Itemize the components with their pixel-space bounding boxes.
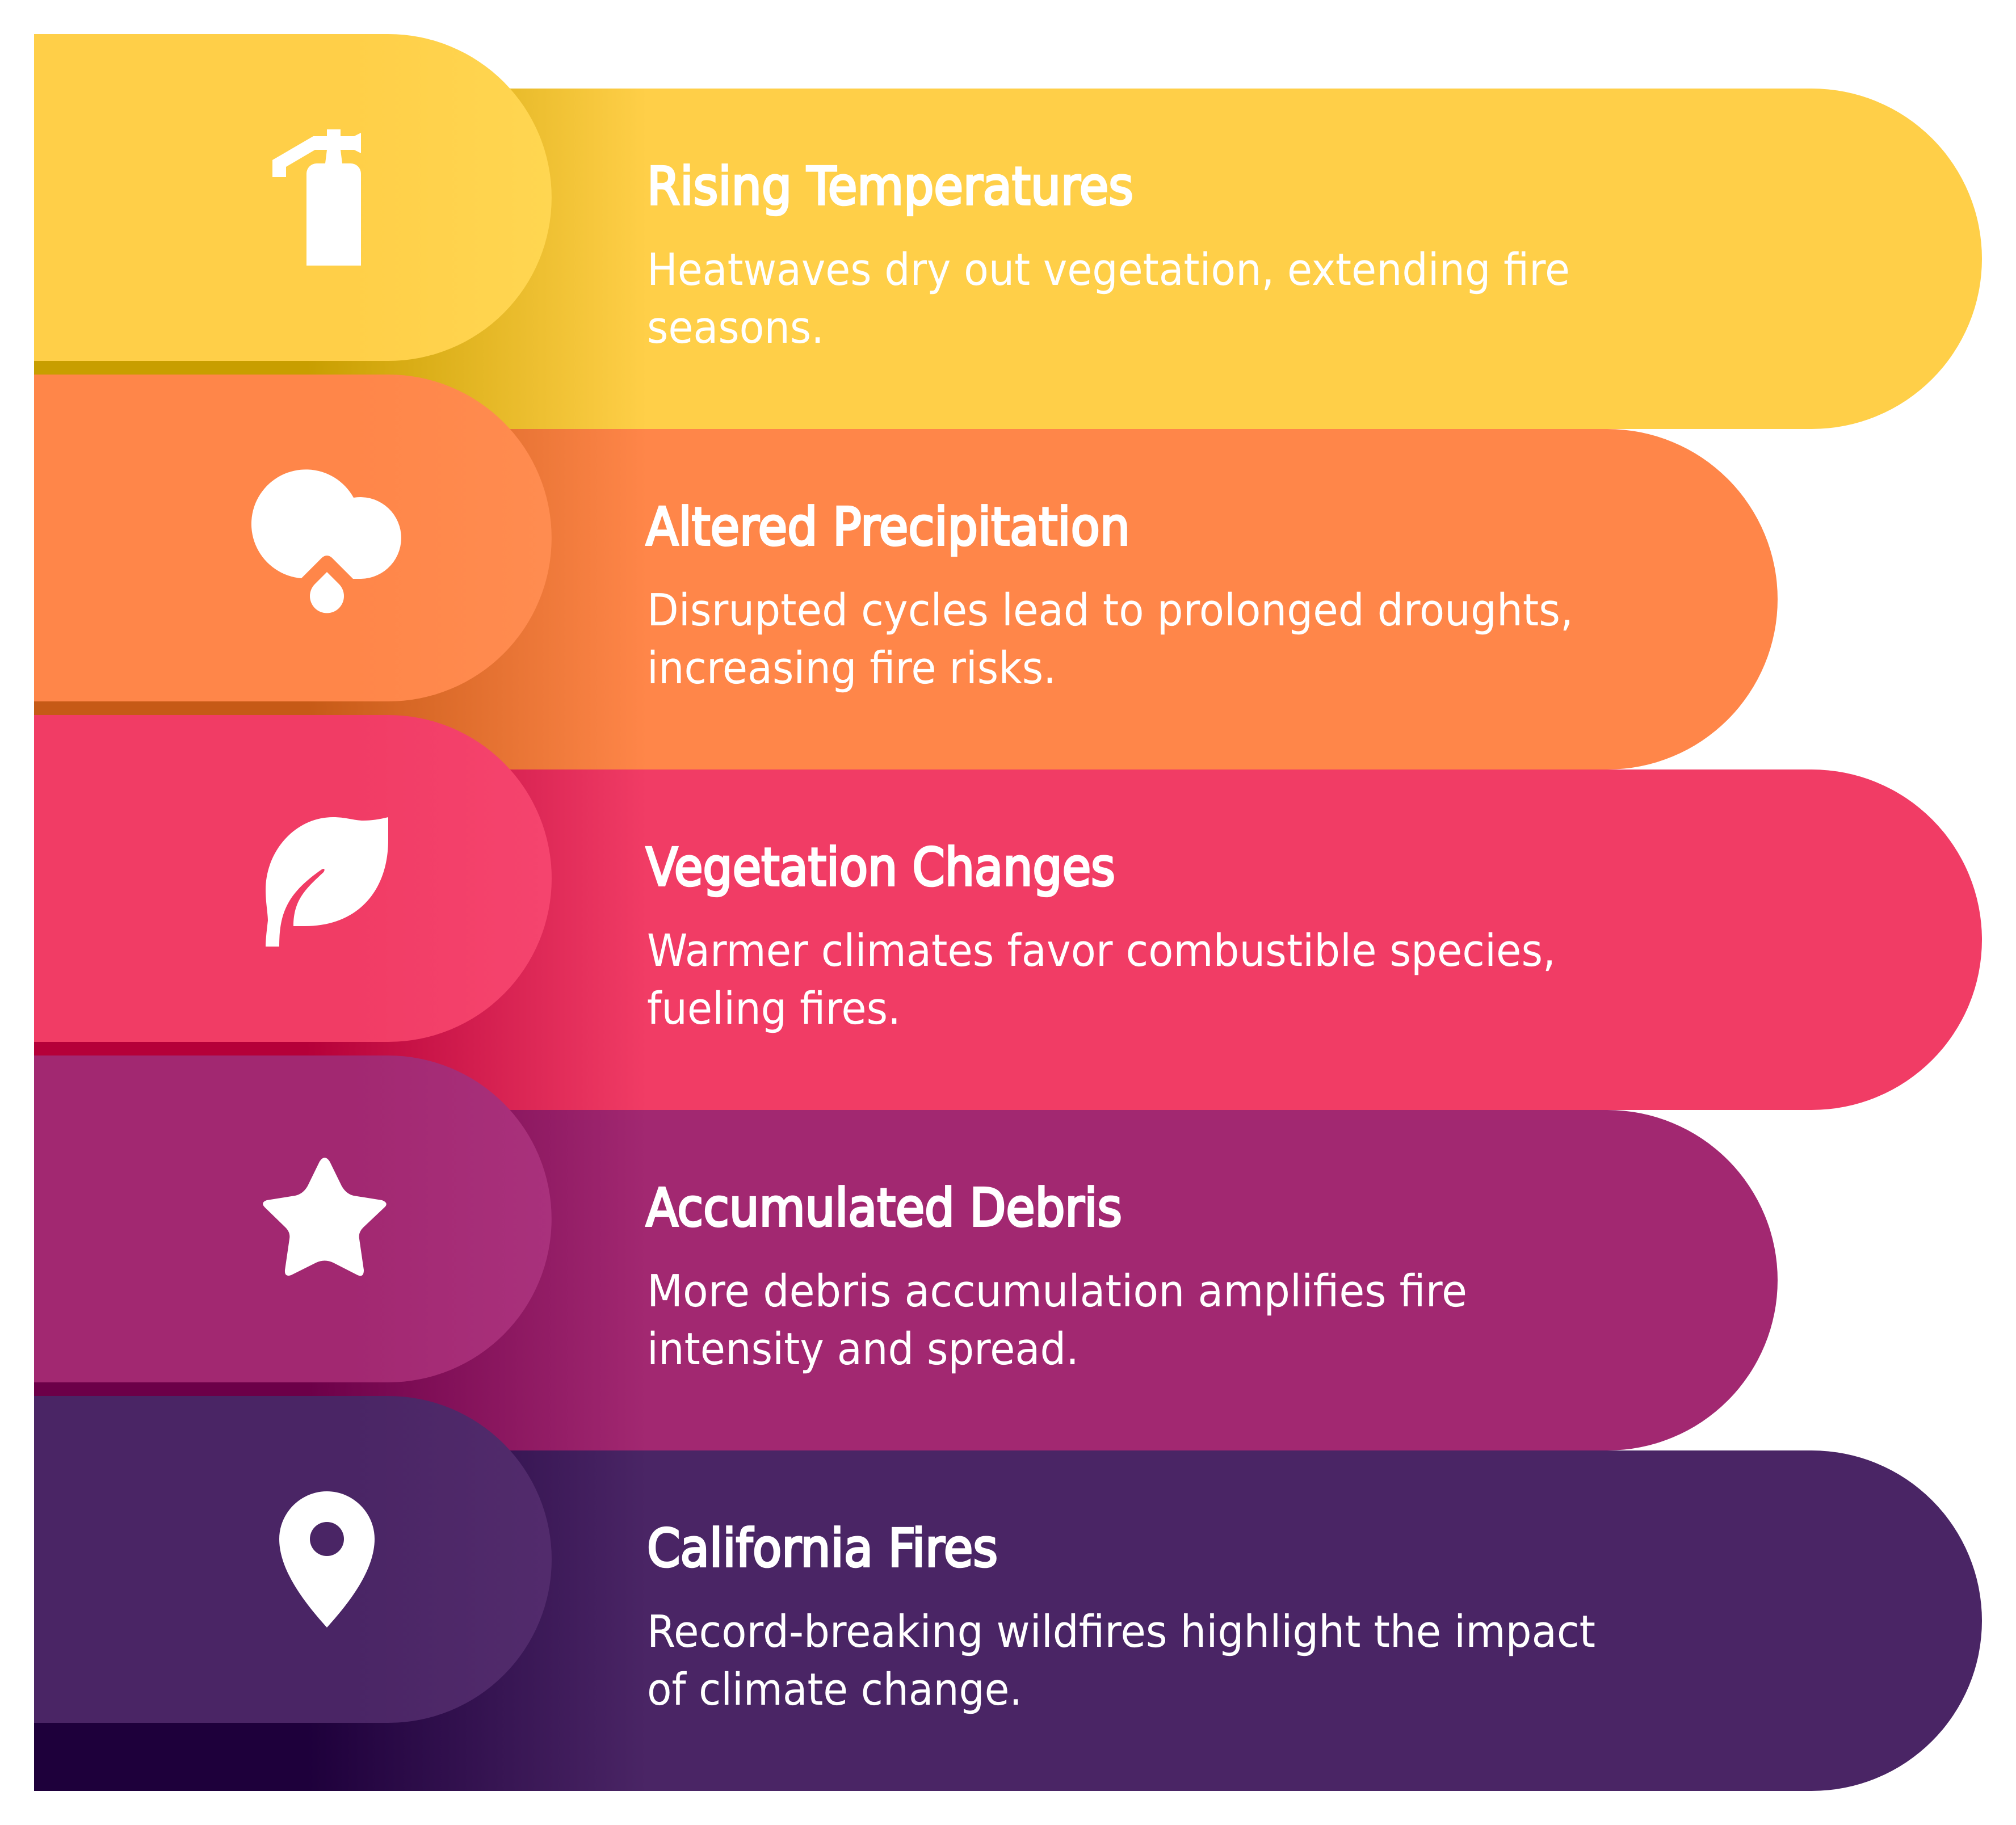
panel: Rising Temperatures	[34, 34, 1982, 429]
icon: star	[263, 1158, 387, 1276]
description: Vegetation Changes: Warmer climates favor combustible species,	[647, 926, 1556, 977]
band: Accumulated Debris	[34, 1110, 1778, 1450]
heading: Altered Precipitation: Altered Precipitation	[646, 497, 1130, 557]
icon tab: Accumulated Debris	[34, 1056, 552, 1382]
description: Altered Precipitation: Disrupted cycles lead to prolonged droughts,	[647, 585, 1573, 636]
icon: location pin	[279, 1491, 375, 1628]
heading: California Fires: California Fires	[647, 1518, 998, 1579]
band: Altered Precipitation	[34, 429, 1778, 769]
description: California Fires: Record-breaking wildfires highlight the impact	[647, 1607, 1595, 1658]
description: Altered Precipitation	[647, 585, 1573, 694]
icon tab: Vegetation Changes	[34, 715, 552, 1042]
description: California Fires: of climate change.	[647, 1664, 1022, 1715]
icon: leaf	[266, 817, 388, 947]
description: Rising Temperatures: seasons.	[647, 302, 824, 354]
icon: fire extinguisher	[272, 129, 361, 266]
icon tab: Altered Precipitation	[34, 375, 552, 701]
description: Rising Temperatures	[647, 245, 1570, 354]
icon: cloud with water drop	[251, 469, 401, 613]
description: California Fires	[647, 1607, 1595, 1715]
description: Accumulated Debris: More debris accumulation amplifies fire	[647, 1266, 1467, 1317]
description: Accumulated Debris	[647, 1266, 1467, 1375]
icon tab: California Fires	[34, 1396, 552, 1723]
band: Rising Temperatures	[34, 89, 1982, 429]
heading: Vegetation Changes: Vegetation Changes	[646, 837, 1115, 898]
description: Rising Temperatures: Heatwaves dry out vegetation, extending fire	[647, 245, 1570, 296]
description: Altered Precipitation: increasing fire risks.	[647, 643, 1056, 694]
panel: California Fires	[34, 1396, 1982, 1791]
description: Accumulated Debris: intensity and spread.	[647, 1324, 1079, 1375]
panel: Accumulated Debris	[34, 1056, 1778, 1450]
heading: Accumulated Debris: Accumulated Debris	[646, 1178, 1122, 1238]
band: California Fires	[34, 1450, 1982, 1791]
description: Vegetation Changes: fueling fires.	[647, 983, 901, 1035]
band: Vegetation Changes	[34, 769, 1982, 1110]
panel: Altered Precipitation	[34, 375, 1778, 769]
description: Vegetation Changes	[647, 926, 1556, 1035]
panel: Vegetation Changes	[34, 715, 1982, 1110]
icon tab: Rising Temperatures	[34, 34, 552, 361]
heading: Rising Temperatures: Rising Temperatures	[647, 156, 1133, 217]
